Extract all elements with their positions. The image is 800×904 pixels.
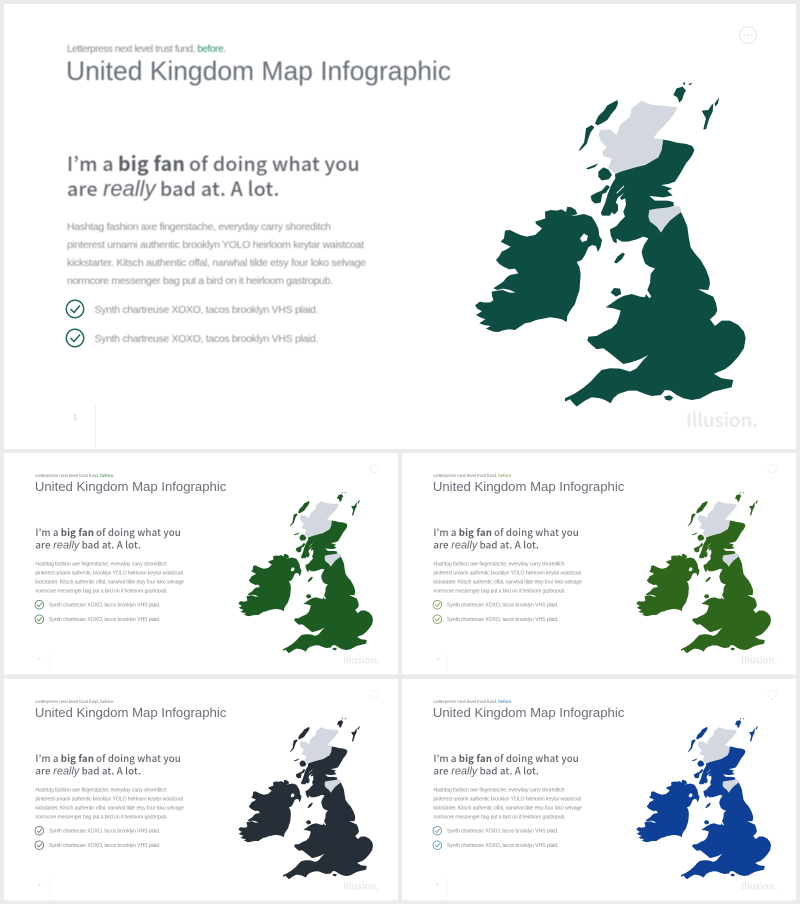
panel: royal blue slide [402, 679, 796, 900]
paragraph: pinterest umami authentic brooklyn YOLO heirloom keytar waistcoat [67, 239, 364, 251]
heading: are [35, 764, 51, 778]
panel: olive green slide [402, 453, 796, 674]
paragraph [433, 561, 582, 594]
menu icon [370, 690, 378, 699]
heading: bad at. A lot. [82, 764, 141, 778]
check item 1 [433, 600, 558, 609]
heading [433, 751, 579, 778]
paragraph: normcore messenger bag put a bird on it heirloom gastropub. [35, 588, 168, 594]
heading: bad at. A lot. [82, 538, 141, 552]
heading: are [67, 173, 98, 202]
check item 2: Synth chartreuse XOXO, tacos brooklyn VHS plaid. [49, 617, 160, 623]
heading: are [433, 538, 449, 552]
paragraph: kickstarter. Kitsch authentic offal, narwhal tilde etsy four loko selvage [67, 257, 366, 269]
paragraph: kickstarter. Kitsch authentic offal, narwhal tilde etsy four loko selvage [433, 805, 582, 811]
heading: I’m a [433, 751, 457, 765]
paragraph [433, 787, 582, 820]
title: United Kingdom Map Infographic [66, 56, 451, 86]
page number: 2 [38, 656, 41, 661]
paragraph: kickstarter. Kitsch authentic offal, narwhal tilde etsy four loko selvage [35, 805, 184, 811]
title: United Kingdom Map Infographic [433, 705, 625, 720]
heading: big fan [61, 751, 94, 765]
heading: big fan [459, 751, 492, 765]
paragraph: normcore messenger bag put a bird on it heirloom gastropub. [433, 814, 566, 820]
menu icon [740, 26, 756, 44]
paragraph: Hashtag fashion axe fingerstache, everyday carry shoreditch [35, 787, 167, 793]
check item 2: Synth chartreuse XOXO, tacos brooklyn VHS plaid. [49, 843, 160, 849]
heading: of doing what you [96, 525, 181, 539]
title: United Kingdom Map Infographic [433, 479, 625, 494]
page number: 4 [38, 882, 41, 887]
heading [67, 148, 360, 202]
menu icon [768, 464, 776, 473]
heading [35, 751, 181, 778]
logo: Illusion. [343, 652, 379, 666]
menu icon [768, 690, 776, 699]
heading: of doing what you [96, 751, 181, 765]
check item 2 [433, 615, 558, 623]
check item 2 [66, 329, 318, 347]
heading: I’m a [67, 148, 114, 177]
logo: Illusion. [343, 878, 379, 892]
check item 2 [35, 841, 160, 849]
paragraph [35, 561, 184, 594]
paragraph: Hashtag fashion axe fingerstache, everyday carry shoreditch [67, 221, 331, 233]
paragraph: pinterest umami authentic brooklyn YOLO heirloom keytar waistcoat [433, 570, 582, 576]
logo: Illusion. [741, 652, 777, 666]
menu icon [370, 464, 378, 473]
paragraph: Hashtag fashion axe fingerstache, everyday carry shoreditch [433, 787, 565, 793]
UK map [636, 492, 771, 653]
panel: main deep teal slide [4, 4, 796, 449]
title: United Kingdom Map Infographic [35, 479, 227, 494]
heading: are [35, 538, 51, 552]
panel: charcoal slide [4, 679, 398, 900]
heading: really [53, 540, 81, 552]
check item 1 [35, 826, 160, 835]
page number: 5 [436, 882, 439, 887]
heading: big fan [61, 525, 94, 539]
heading: bad at. A lot. [480, 538, 539, 552]
heading: of doing what you [494, 751, 579, 765]
heading: big fan [459, 525, 492, 539]
check item 1: Synth chartreuse XOXO, tacos brooklyn VHS plaid. [447, 603, 558, 609]
UK map [238, 492, 373, 653]
check item 1 [433, 826, 558, 835]
paragraph: Hashtag fashion axe fingerstache, everyday carry shoreditch [35, 561, 167, 567]
heading: bad at. A lot. [160, 173, 280, 202]
page number: 3 [436, 656, 439, 661]
UK map [238, 718, 373, 879]
kicker: Letterpress next level trust fund, before. [35, 473, 114, 479]
check item 2: Synth chartreuse XOXO, tacos brooklyn VHS plaid. [447, 617, 558, 623]
heading: really [103, 176, 158, 201]
page number: 1 [73, 413, 78, 422]
paragraph: pinterest umami authentic brooklyn YOLO heirloom keytar waistcoat [35, 796, 184, 802]
check item 1 [66, 300, 318, 318]
check item 1: Synth chartreuse XOXO, tacos brooklyn VHS plaid. [94, 304, 318, 316]
heading: are [433, 764, 449, 778]
paragraph: normcore messenger bag put a bird on it heirloom gastropub. [35, 814, 168, 820]
check item 2: Synth chartreuse XOXO, tacos brooklyn VHS plaid. [94, 333, 318, 345]
check item 1: Synth chartreuse XOXO, tacos brooklyn VHS plaid. [49, 603, 160, 609]
paragraph: normcore messenger bag put a bird on it heirloom gastropub. [67, 275, 333, 287]
check item 2 [433, 841, 558, 849]
heading: big fan [118, 148, 185, 177]
paragraph: kickstarter. Kitsch authentic offal, narwhal tilde etsy four loko selvage [35, 579, 184, 585]
paragraph: pinterest umami authentic brooklyn YOLO heirloom keytar waistcoat [35, 570, 184, 576]
check item 1 [35, 600, 160, 609]
UK map [636, 718, 771, 879]
heading: I’m a [35, 751, 59, 765]
check item 1: Synth chartreuse XOXO, tacos brooklyn VHS plaid. [447, 829, 558, 835]
kicker: Letterpress next level trust fund, before. [67, 44, 226, 55]
heading: I’m a [35, 525, 59, 539]
heading: of doing what you [494, 525, 579, 539]
heading [35, 525, 181, 552]
check item 2 [35, 615, 160, 623]
paragraph: pinterest umami authentic brooklyn YOLO heirloom keytar waistcoat [433, 796, 582, 802]
title: United Kingdom Map Infographic [35, 705, 227, 720]
heading: really [451, 540, 479, 552]
paragraph [35, 787, 184, 820]
paragraph: Hashtag fashion axe fingerstache, everyday carry shoreditch [433, 561, 565, 567]
UK map [475, 82, 746, 407]
heading: really [53, 766, 81, 778]
logo: Illusion. [686, 406, 758, 433]
kicker: Letterpress next level trust fund, before. [35, 699, 114, 705]
heading: I’m a [433, 525, 457, 539]
heading: bad at. A lot. [480, 764, 539, 778]
paragraph [67, 221, 366, 287]
logo: Illusion. [741, 878, 777, 892]
check item 2: Synth chartreuse XOXO, tacos brooklyn VHS plaid. [447, 843, 558, 849]
kicker: Letterpress next level trust fund, before. [433, 473, 512, 479]
heading [433, 525, 579, 552]
paragraph: kickstarter. Kitsch authentic offal, narwhal tilde etsy four loko selvage [433, 579, 582, 585]
panel: forest green slide [4, 453, 398, 674]
check item 1: Synth chartreuse XOXO, tacos brooklyn VHS plaid. [49, 829, 160, 835]
heading: really [451, 766, 479, 778]
paragraph: normcore messenger bag put a bird on it heirloom gastropub. [433, 588, 566, 594]
heading: of doing what you [189, 148, 360, 177]
kicker: Letterpress next level trust fund, before. [433, 699, 512, 705]
